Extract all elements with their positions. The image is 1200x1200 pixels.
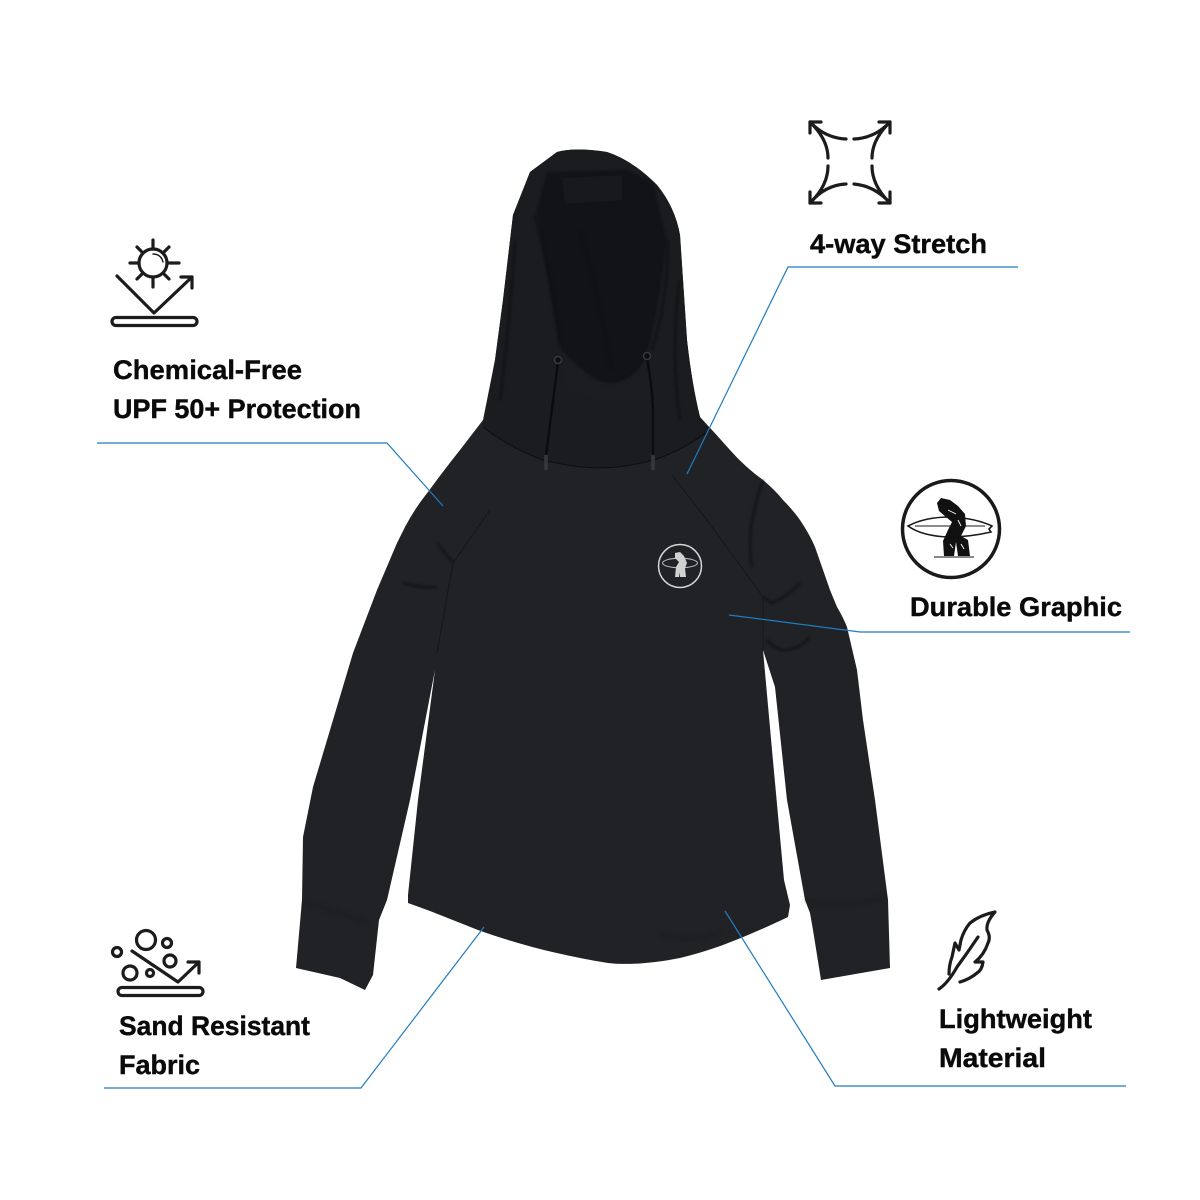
fold shadows [403,215,810,650]
faint cuff and hem shadows [304,898,885,939]
text: sand resistant fabric: Sand Resistant [119,1011,310,1041]
text: sand resistant fabric [119,1011,310,1080]
callout line: lightweight [725,911,1126,1086]
icon: sand particles bouncing off fabric [112,930,203,996]
callout line: durable graphic [729,615,1130,632]
text: chemical-free UPF protection [113,355,361,424]
chest logo [658,544,702,588]
text: 4-way stretch: 4-way Stretch [810,229,987,259]
collar seam [483,427,710,468]
hood outer panel [483,150,710,468]
callout line: UPF protection [97,443,443,506]
icon: sun reflecting off surface [112,240,197,326]
text: lightweight material [939,1004,1092,1073]
text: lightweight material: Material [939,1043,1046,1073]
left drawstring [546,356,562,470]
hoodie garment [296,150,890,990]
callout line: 4-way stretch [687,267,1018,474]
text: sand resistant fabric: Fabric [119,1050,200,1080]
text: chemical-free UPF protection: Chemical-Free [113,355,302,385]
right drawstring [644,352,653,470]
icon: four-way stretch arrows [810,122,890,203]
text: lightweight material: Lightweight [939,1004,1092,1034]
neck fold shading [560,352,655,402]
garment silhouette [296,150,890,990]
hood opening interior [537,170,667,383]
icon: surfing bear badge [902,480,1000,578]
icon: feather [939,912,995,989]
hood inner label band [562,175,622,204]
text: chemical-free UPF protection: UPF 50+ Protection [113,394,361,424]
text: durable graphic: Durable Graphic [910,592,1122,622]
callout line: sand resistant [104,927,484,1088]
raglan seams [437,475,763,653]
